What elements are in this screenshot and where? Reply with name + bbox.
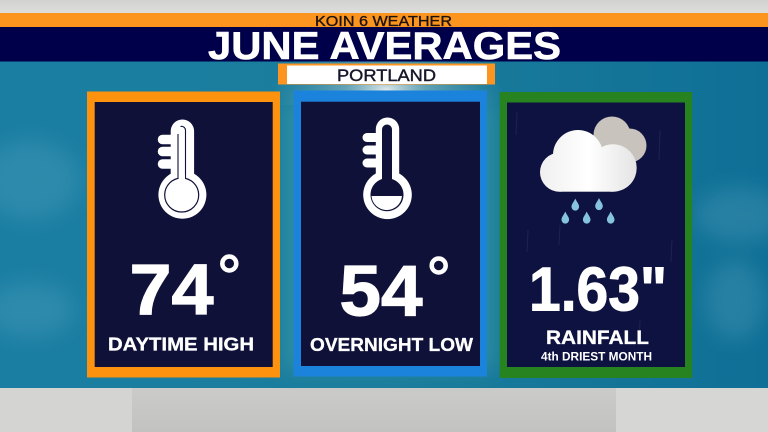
location badge: PORTLAND xyxy=(337,67,436,85)
icon: thermometer low xyxy=(363,118,412,219)
rainfall value: 1.63" xyxy=(529,256,667,324)
panel label: DAYTIME HIGH xyxy=(108,334,254,354)
grey back cloud xyxy=(594,116,646,162)
icon: rain cloud xyxy=(540,116,646,224)
temperature value: 74 xyxy=(130,251,214,330)
top grey band xyxy=(0,0,768,14)
rain drops xyxy=(562,198,614,224)
panel: daytime high xyxy=(87,92,280,378)
header orange bar xyxy=(0,13,768,27)
panel label: RAINFALL xyxy=(546,328,649,349)
station label: KOIN 6 WEATHER xyxy=(315,14,452,30)
temperature value: 54 xyxy=(340,252,423,332)
location badge xyxy=(278,64,495,85)
panel: rainfall xyxy=(500,92,692,378)
rain streaks xyxy=(516,112,672,345)
white front cloud xyxy=(540,130,637,192)
sky background xyxy=(0,61,768,388)
bottom grey band xyxy=(0,388,768,432)
degree symbol xyxy=(432,258,446,272)
panel label: OVERNIGHT LOW xyxy=(310,334,474,355)
degree symbol xyxy=(222,256,236,270)
header navy bar xyxy=(0,27,768,62)
panel sub-label: 4th DRIEST MONTH xyxy=(541,352,652,364)
icon: thermometer high xyxy=(158,119,206,219)
title: JUNE AVERAGES xyxy=(208,25,561,68)
panel: overnight low xyxy=(294,90,487,376)
